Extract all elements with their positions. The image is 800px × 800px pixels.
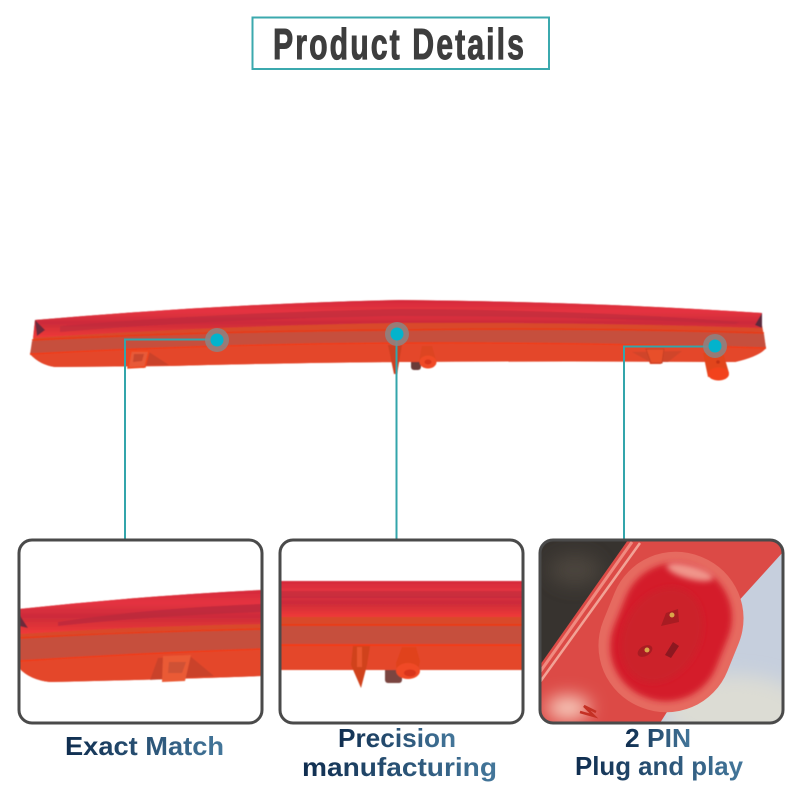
shadows near tabs [128,352,169,366]
title: Product Details [273,20,526,69]
label: precision manufacturing: manufacturing [302,752,497,782]
red housing [540,540,783,723]
title [252,18,549,69]
small connector [419,346,436,362]
label: 2 pin plug and play: Plug and play [575,751,744,781]
leader: 2 pin plug [624,334,727,540]
connector oval [598,552,744,712]
seam line [32,329,764,340]
lens [33,300,762,338]
leader: precision manufacturing [385,322,409,540]
parts behind bar [411,358,421,370]
darker band [30,330,766,355]
product image: red brake light bar [30,300,766,380]
pins [661,609,679,626]
label: exact match: Exact Match [65,731,224,761]
leader: exact match [125,328,229,540]
label: 2 pin plug and play [575,723,744,781]
base silhouette [30,300,766,367]
tab fronts [128,351,149,368]
lower body [30,343,766,367]
label: precision manufacturing: Precision [338,723,456,753]
plug connector [703,349,729,377]
pointer [388,345,402,373]
label: precision manufacturing [302,723,497,782]
label: 2 pin plug and play: 2 PIN [625,723,691,753]
panel: precision manufacturing [280,540,523,723]
panel: exact match [19,540,262,723]
panel: 2 pin connector photo [538,538,784,724]
